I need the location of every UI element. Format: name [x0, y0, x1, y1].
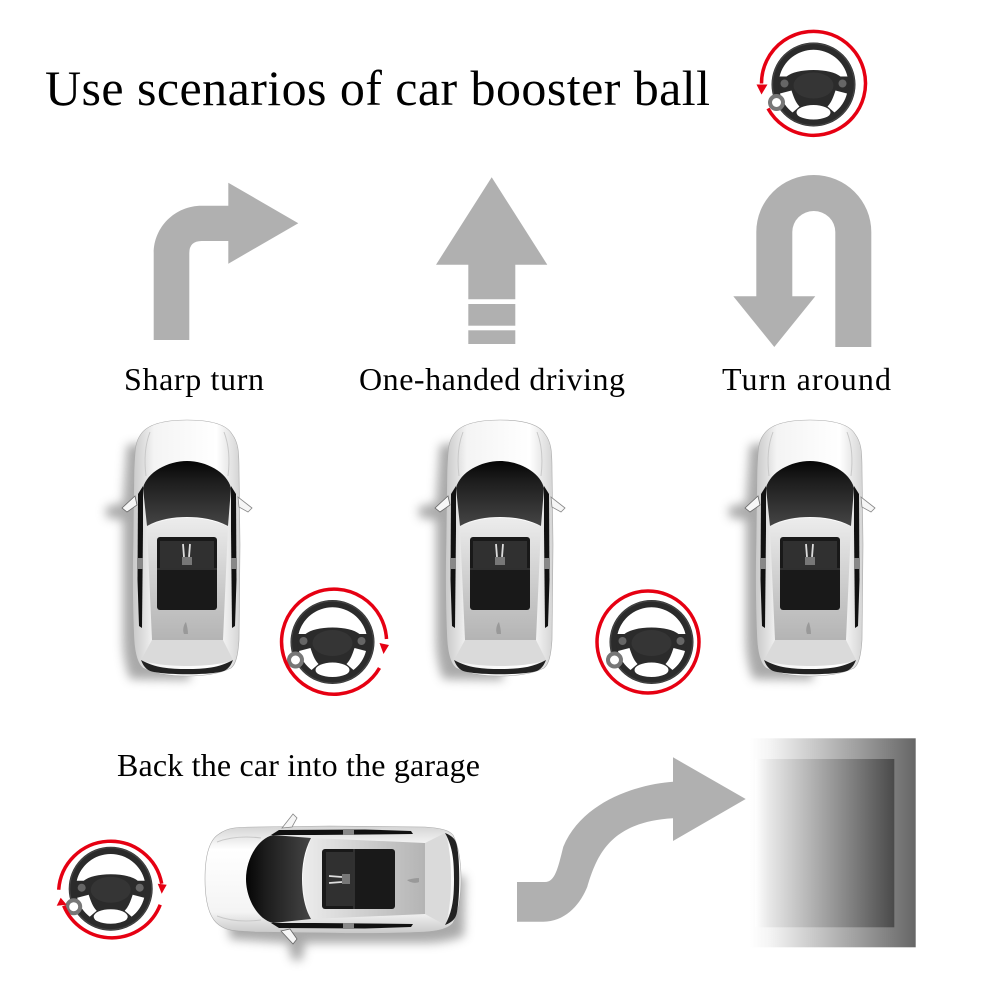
- car: top view for turn around: [729, 420, 875, 680]
- arrow: u-turn: [733, 175, 871, 347]
- car: top view for sharp turn: [106, 420, 252, 680]
- icon: steering wheel with two-way arrows: [57, 841, 167, 938]
- label: turn around: Turn around: [722, 361, 891, 397]
- title: Use scenarios of car booster ball: [45, 60, 710, 116]
- arrow: one-handed driving: [436, 177, 547, 344]
- arrow: curved path into garage: [517, 757, 746, 922]
- label: back the car into the garage: Back the car into the garage: [117, 747, 480, 783]
- icon: steering wheel with counter-clockwise arrow: [756, 31, 865, 135]
- icon: steering wheel with clockwise arrow: [282, 589, 389, 694]
- label: sharp turn: Sharp turn: [124, 361, 264, 397]
- label: one-handed driving: One-handed driving: [359, 361, 625, 397]
- icon: steering wheel with full red ring: [597, 591, 699, 693]
- car: top view for one-handed driving: [419, 420, 565, 680]
- car: side-on top view reversing: [205, 814, 465, 960]
- garage: gradient outer frame and inner bay: [750, 738, 916, 947]
- arrow: sharp turn: [154, 183, 298, 340]
